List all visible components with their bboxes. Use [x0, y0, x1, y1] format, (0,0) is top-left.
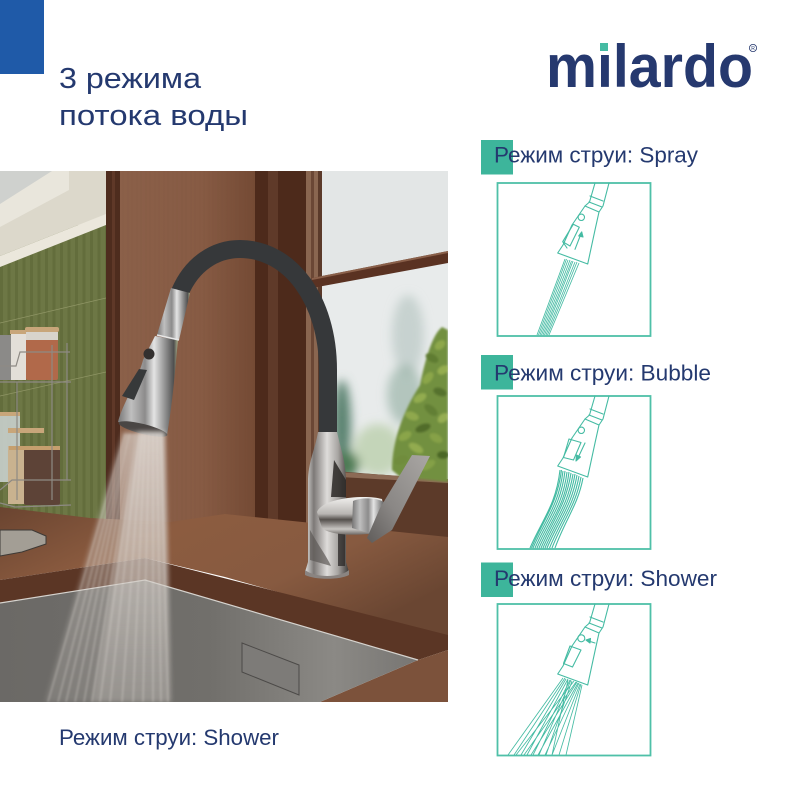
title: потока воды	[59, 100, 248, 132]
spray frame	[498, 183, 650, 336]
teal marker square	[481, 140, 513, 174]
photo: kitchen faucet with shower stream	[0, 171, 450, 702]
sill	[346, 472, 448, 537]
bubble heading: Режим струи: Bubble	[494, 360, 711, 386]
title: 3 режима	[59, 63, 202, 95]
corner accent square	[0, 0, 44, 74]
black flexible hose	[180, 249, 328, 432]
spray heading: Режим струи: Spray	[494, 142, 699, 168]
water stream	[45, 432, 171, 702]
spray jets	[537, 259, 579, 335]
teal marker square	[481, 562, 513, 597]
wall and wainscot	[0, 171, 110, 525]
brand logo: milardo	[546, 33, 753, 100]
window with blurred garden	[312, 171, 448, 540]
panel: shower mode	[481, 562, 718, 756]
bubble frame	[498, 396, 650, 549]
panel: spray mode	[481, 140, 699, 336]
bubble jets	[530, 470, 583, 548]
faucet body and lever	[305, 432, 430, 579]
panel: bubble mode	[481, 355, 711, 549]
photo caption: Режим струи: Shower	[59, 725, 279, 750]
teal marker square	[481, 355, 513, 390]
countertop	[0, 507, 448, 702]
shower jets	[508, 678, 582, 755]
towel	[0, 530, 46, 556]
icon: spray head with up arrow	[558, 183, 609, 264]
potted plant	[392, 327, 450, 482]
wood wall panel	[106, 171, 322, 531]
icon: bubble head with down arrow	[558, 396, 609, 477]
brand logo: R	[751, 46, 755, 52]
steel sink	[0, 580, 418, 702]
spice jars on rack	[0, 327, 71, 507]
spray head	[118, 288, 190, 440]
shower heading: Режим струи: Shower	[494, 566, 718, 591]
shower frame	[498, 604, 650, 756]
title	[59, 63, 248, 132]
icon: shower head with side arrow	[558, 604, 609, 685]
